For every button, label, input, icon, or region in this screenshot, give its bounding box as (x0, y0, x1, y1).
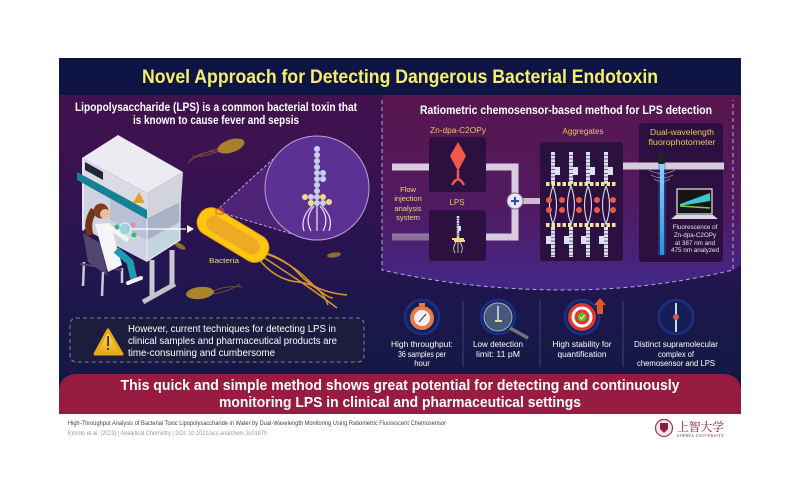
magnified LPS circle (265, 136, 369, 240)
flagella (258, 252, 347, 308)
conclusion banner: This quick and simple method shows great potential for detecting and continuously (120, 378, 680, 394)
panel: LPS (429, 198, 486, 261)
citation: Kimoto et al. (2023) | Analytical Chemistry | DOI: 10.1021/acs.analchem.3c01870 (68, 431, 268, 437)
panel: fluorophotometer: Dual-wavelength (650, 128, 714, 137)
hazard sign (133, 192, 145, 203)
background bacteria (174, 135, 341, 300)
label: flow injection system: Flow (400, 185, 416, 194)
label: flow injection system: injection (394, 194, 422, 203)
stat: stability: quantification (558, 350, 606, 359)
callout: current technique limits (70, 318, 364, 362)
callout text: However, current techniques for detecting LPS in (128, 323, 336, 335)
label: flow injection system (394, 185, 422, 222)
glass frame (147, 202, 180, 261)
laptop caption (671, 224, 719, 254)
panel background (59, 58, 741, 414)
icon: complex (673, 303, 679, 332)
logo: Sophia University (656, 418, 724, 438)
cabinet legs (143, 250, 175, 302)
stat: high throughput: 36 samples per (398, 350, 446, 359)
icon: laptop (671, 189, 718, 219)
scientist (89, 204, 141, 283)
chair (80, 233, 122, 296)
conclusion banner (59, 374, 741, 414)
callout text: time-consuming and cumbersome (128, 347, 275, 359)
label: Bacteria: Bacteria (209, 256, 240, 265)
left wall (82, 158, 84, 231)
citation (68, 421, 446, 437)
heading: LPS description: is known to cause fever and sepsis (133, 115, 299, 127)
illustration: biosafety cabinet with scientist (77, 135, 183, 302)
icon: warning (95, 330, 122, 354)
laptop caption: at 387 nm and (675, 240, 716, 247)
light beam (649, 153, 675, 255)
icon: plus mixer (507, 193, 523, 209)
stat: detection limit (473, 300, 528, 359)
stat: detection limit: limit: 11 pM (476, 350, 520, 359)
hood samples (119, 223, 131, 235)
label: flow injection system: system (396, 213, 420, 222)
flow tubes (392, 166, 724, 237)
icon: stopwatch (410, 303, 434, 330)
icon: target (568, 298, 606, 331)
cabinet front (82, 158, 147, 212)
panel: ratiometric method background (382, 95, 741, 290)
heading: LPS description: Lipopolysaccharide (LPS) is a common bacterial toxin that (75, 102, 357, 114)
stat: supramolecular complex: complex of (658, 350, 695, 359)
panel: Zn-dpa-C2OPy (429, 126, 486, 192)
title banner (59, 58, 741, 95)
heading: method: Ratiometric chemosensor-based method for LPS detection (420, 105, 712, 117)
cabinet interior (82, 175, 147, 262)
callout text (128, 323, 337, 359)
panel: LPS: LPS (449, 198, 465, 207)
panel: Zn-dpa-C2OPy: Zn-dpa-C2OPy (430, 126, 486, 135)
stat: stability (552, 298, 612, 359)
stat: high throughput: hour (414, 359, 430, 368)
stat: high throughput (391, 300, 453, 368)
icon: main bacterium (192, 203, 274, 267)
panel: aggregates (540, 127, 623, 261)
title banner: Novel Approach for Detecting Dangerous Bacterial Endotoxin (142, 66, 658, 88)
teal sash (77, 172, 147, 219)
zoom cone (216, 159, 292, 234)
label: flow injection system: analysis (394, 204, 422, 213)
heading: LPS description (75, 102, 357, 127)
stat: detection limit: Low detection (473, 340, 523, 349)
cabinet side (147, 172, 183, 219)
citation: High-Throughput Analysis of Bacterial Toxic Lipopolysaccharide in Water by Dual-Wavelength Monitoring Using Ratiometric Fluorescent Chemosensor (68, 421, 446, 427)
cabinet display (85, 162, 103, 180)
panel: aggregates: Aggregates (563, 127, 603, 136)
arrow: cabinet to bacteria (130, 225, 194, 233)
logo: Sophia University: 上智大学 (677, 418, 724, 435)
laptop caption: Zn-dpa-C2OPy (674, 232, 717, 239)
callout text: clinical samples and pharmaceutical products are (128, 335, 337, 347)
stat: high throughput: High throughput: (391, 340, 453, 349)
panel: fluorophotometer: fluorophotometer (648, 138, 716, 147)
cabinet top (82, 135, 183, 193)
panel: fluorophotometer (639, 123, 724, 262)
stat: supramolecular complex: chemosensor and LPS (637, 359, 715, 368)
laptop caption: Fluorescence of (673, 224, 718, 231)
stat: supramolecular complex: Distinct supramolecular (634, 340, 718, 349)
icon: magnifier (484, 303, 528, 338)
logo: Sophia University: SOPHIA UNIVERSITY (677, 433, 724, 438)
stat: stability: High stability for (552, 340, 612, 349)
conclusion banner: monitoring LPS in clinical and pharmaceutical settings (219, 395, 581, 411)
laptop caption: 475 nm analyzed (671, 247, 719, 254)
stat: supramolecular complex (634, 300, 718, 368)
